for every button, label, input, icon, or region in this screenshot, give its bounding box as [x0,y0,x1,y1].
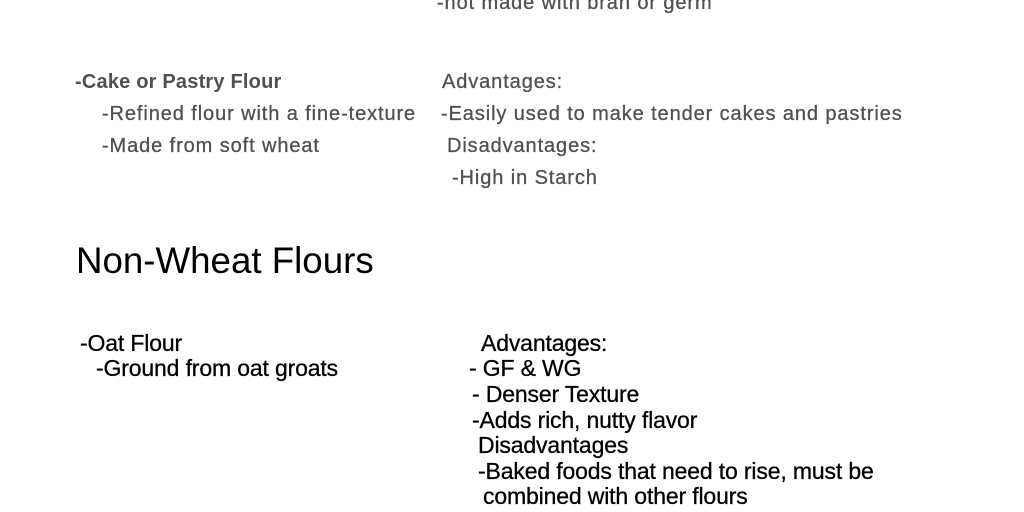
advantages heading: Advantages: [442,71,563,93]
advantages heading: Advantages: [481,330,607,356]
detail: oat groats: -Ground from oat groats [96,355,338,381]
detail: refined flour: -Refined flour with a fine-texture [102,103,416,125]
item: gf & wg: - GF & WG [469,355,581,381]
item: nutty flavor: -Adds rich, nutty flavor [472,407,697,433]
item: denser texture: - Denser Texture [472,381,639,407]
disadvantage continuation: combined with other flours [483,483,748,509]
disadvantages heading: Disadvantages [478,432,628,458]
detail: soft wheat: -Made from soft wheat [102,135,320,157]
disadvantages heading: Disadvantages: [447,135,597,157]
disadvantage item: -High in Starch [452,167,598,189]
text block: oat flour description [80,330,338,382]
advantage item: -Easily used to make tender cakes and pastries [441,103,903,125]
label: oat flour: -Oat Flour [80,330,182,356]
text block: cake flour pros and cons [441,71,903,189]
disadvantage item: -Baked foods that need to rise, must be [478,458,874,484]
text block: cake or pastry flour description [75,71,416,157]
heading: non-wheat flours: Non-Wheat Flours [76,240,374,281]
text block: oat flour pros and cons [469,330,874,509]
label: cake or pastry flour: -Cake or Pastry Flour [75,71,282,93]
